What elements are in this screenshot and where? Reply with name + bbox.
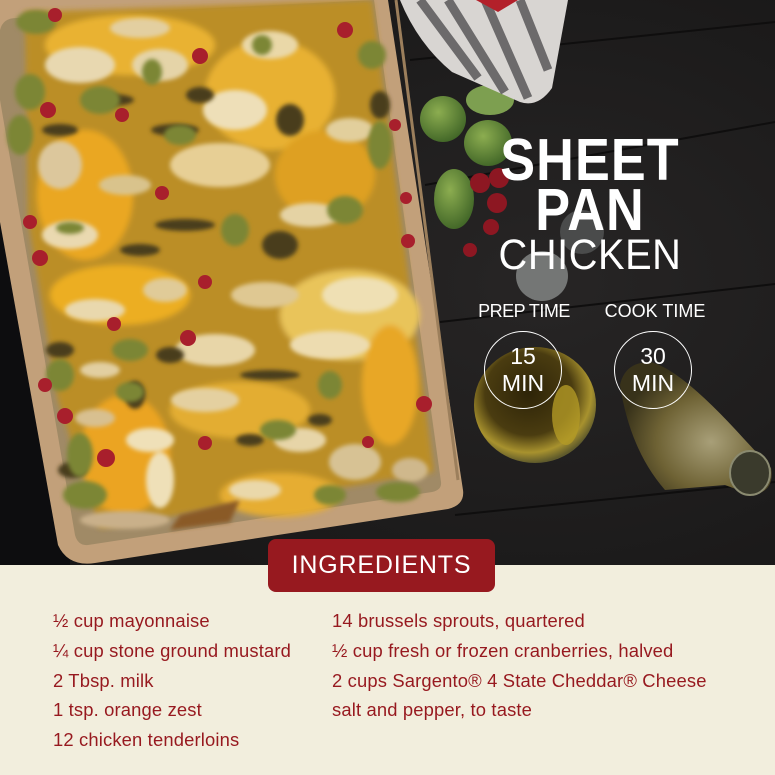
sheet pan — [0, 0, 463, 564]
ingredients list: right column: salt and pepper, to taste — [332, 699, 532, 720]
cook time badge — [614, 331, 692, 409]
ingredients list: left column: 1 tsp. orange zest — [53, 699, 202, 720]
ingredients list: right column — [332, 610, 707, 720]
prep time badge — [484, 331, 562, 409]
glass of wine — [474, 347, 596, 463]
ingredients list: right column: ½ cup fresh or frozen cranberries, halved — [332, 640, 673, 661]
salt shaker — [516, 210, 604, 301]
ingredients list: left column: 2 Tbsp. milk — [53, 670, 154, 691]
cook time badge: MIN — [632, 370, 674, 396]
sprouts on table — [420, 96, 512, 229]
ingredients list: left column — [53, 610, 291, 750]
background photo: sheet pan of chicken on dark wood — [0, 0, 775, 565]
wood table — [0, 0, 775, 565]
sprout behind towel — [466, 85, 514, 115]
prep time label: PREP TIME — [478, 301, 570, 321]
cranberries on table — [463, 168, 509, 257]
cook time label: COOK TIME — [605, 301, 705, 321]
title line: CHICKEN: CHICKEN — [499, 231, 681, 279]
food: chicken and cheese — [25, 0, 434, 530]
prep time badge: MIN — [502, 370, 544, 396]
title: SHEET — [500, 127, 680, 193]
ingredients list: right column: 14 brussels sprouts, quartered — [332, 610, 585, 631]
ingredients list: left column: ¼ cup stone ground mustard — [53, 640, 291, 661]
towel — [400, 0, 568, 103]
ingredients banner — [268, 539, 495, 592]
ingredients banner: INGREDIENTS — [292, 551, 471, 579]
sprouts and cranberries on pan — [7, 8, 432, 509]
wine bottle — [620, 362, 772, 495]
title line: PAN: PAN — [535, 177, 645, 243]
cook time badge: 30 — [640, 343, 666, 369]
ingredients list: left column: 12 chicken tenderloins — [53, 729, 239, 750]
prep time badge: 15 — [510, 343, 536, 369]
ingredients list: left column: ½ cup mayonnaise — [53, 610, 210, 631]
ingredients list: right column: 2 cups Sargento® 4 State Cheddar® Cheese — [332, 670, 707, 691]
